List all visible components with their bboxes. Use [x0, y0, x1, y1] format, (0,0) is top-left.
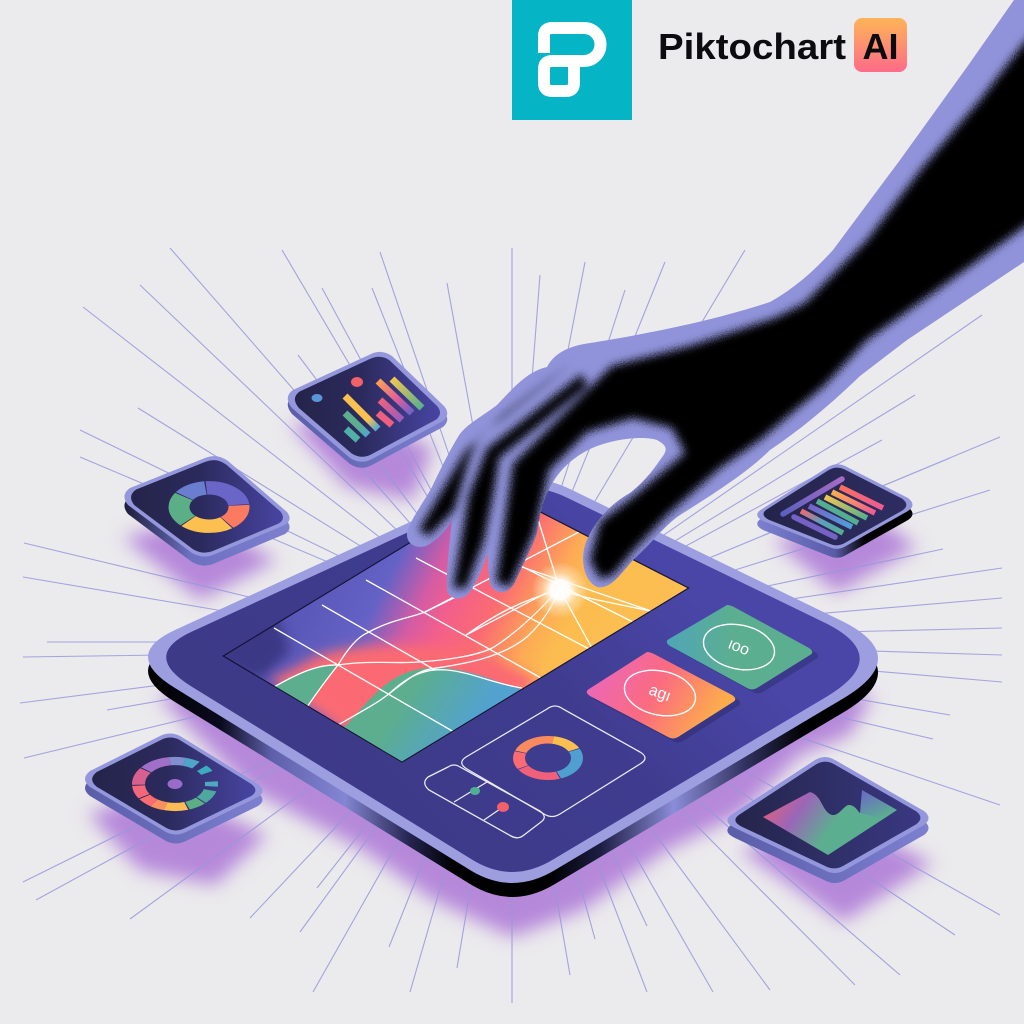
red slider dot [497, 802, 509, 812]
tablet face [166, 488, 860, 872]
hand rim [407, 0, 1024, 599]
gauge centre dot [168, 779, 182, 789]
purple glow shadows [88, 420, 933, 937]
floating card: bar chart [288, 352, 447, 468]
outlined donut panel [462, 706, 645, 816]
coral area [270, 646, 540, 770]
floating card: area chart [727, 757, 928, 883]
touch glare [532, 562, 588, 618]
dots [312, 394, 322, 402]
gauge ring [138, 761, 212, 807]
floating card: donut chart [124, 456, 290, 566]
area shape [763, 792, 897, 855]
bars [783, 479, 883, 537]
pink card value: agı [646, 682, 673, 705]
green slider dot [470, 787, 480, 795]
main tablet [148, 478, 878, 897]
donut [179, 488, 239, 526]
tablet rim [148, 478, 878, 883]
white grid and curves [274, 513, 654, 732]
pink stat card [587, 652, 740, 742]
green stat card [667, 605, 818, 694]
tablet edge [148, 492, 878, 897]
main area chart [222, 512, 690, 763]
hand silhouette [407, 0, 1024, 599]
green blue area [343, 668, 523, 763]
green area left [274, 665, 338, 707]
donut chart [519, 740, 577, 776]
floating card: horizontal bars [757, 464, 912, 558]
logo mark [544, 28, 600, 91]
floating card: radial gauge [85, 734, 262, 844]
logo wordmark: Piktochart [658, 26, 846, 67]
hand shadow core [419, 10, 1024, 588]
AI badge: AI [862, 26, 898, 67]
logo: teal square [512, 0, 632, 120]
bars [345, 379, 422, 440]
dark corner [224, 620, 294, 680]
outlined slider panel [425, 765, 544, 838]
area peak [860, 790, 897, 818]
green card value: ιoo [726, 636, 752, 659]
radial lines [20, 248, 1002, 1003]
AI badge [854, 18, 907, 72]
chart edge [222, 489, 690, 763]
